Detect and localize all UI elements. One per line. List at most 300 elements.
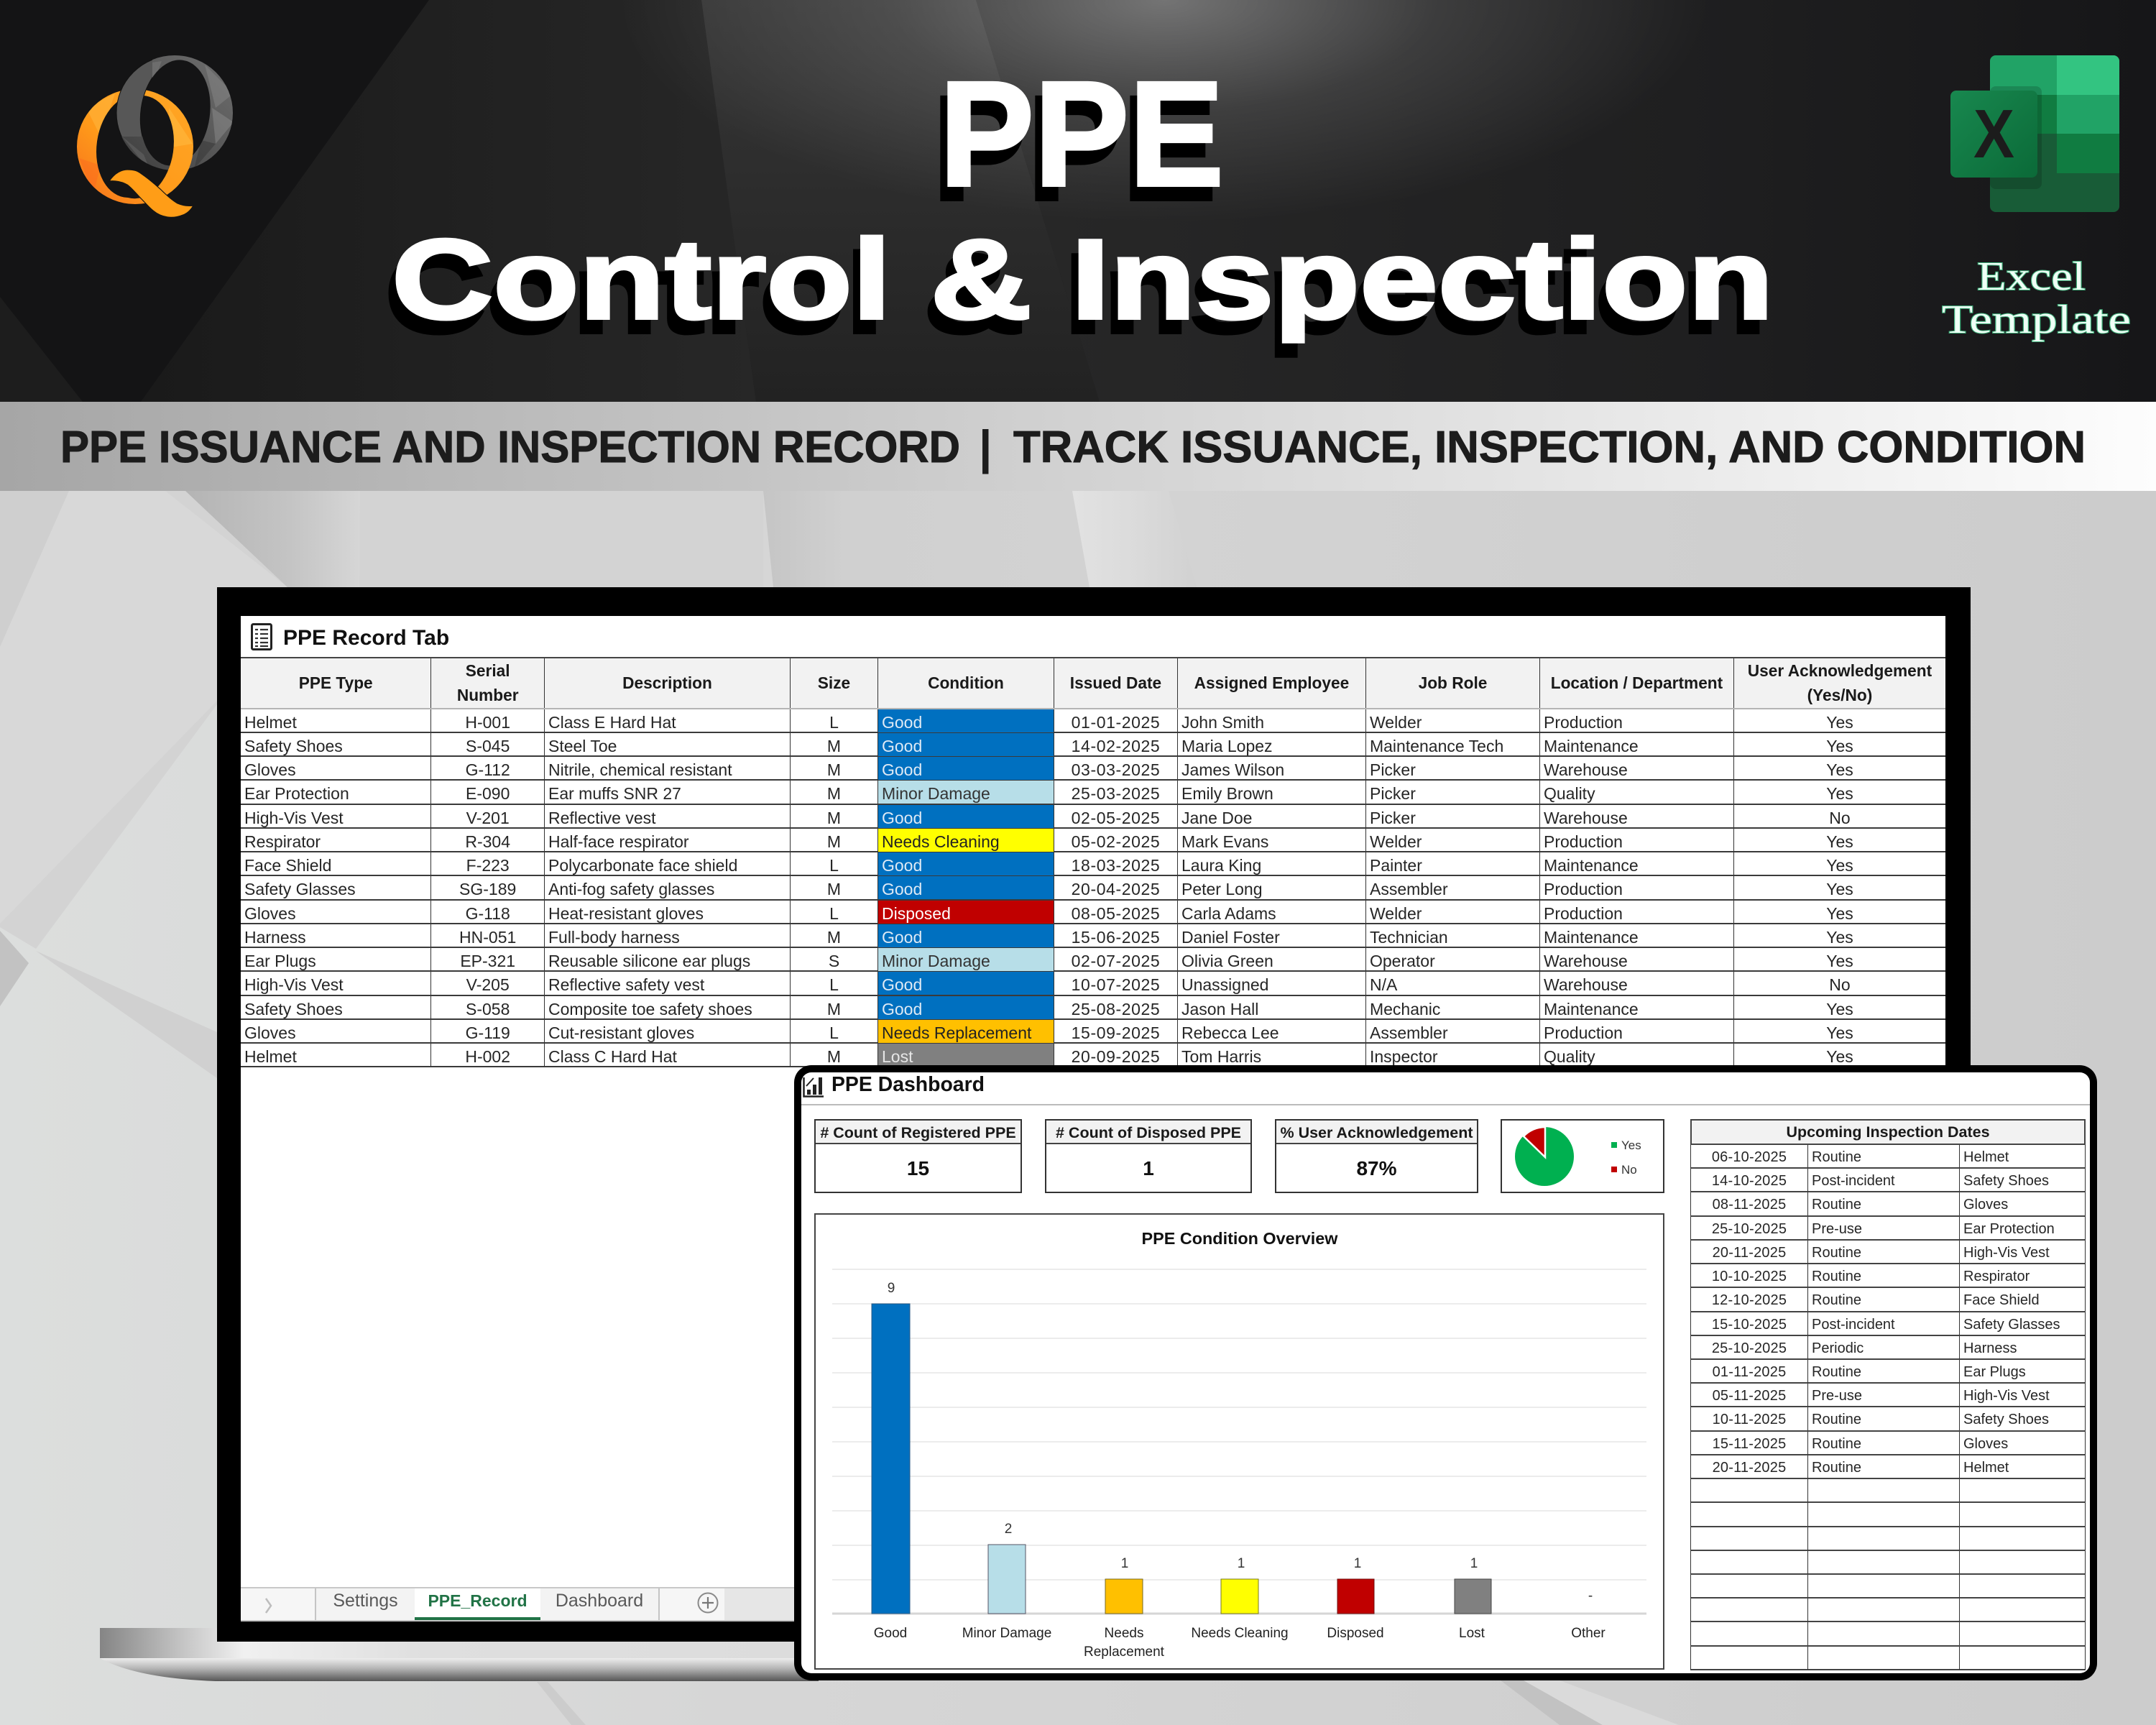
bar: Minor Damage: [962, 1522, 1051, 1641]
title: Control & Inspection: Control & Inspection: [392, 216, 1774, 343]
row: Safety Glasses SG-189: SG-189: [459, 880, 516, 898]
row: Safety Shoes S-058: Yes: [1826, 999, 1853, 1018]
row 20-11-2025: 20-11-2025: [1713, 1245, 1786, 1261]
row 06-10-2025: [1690, 1145, 2086, 1169]
row: Gloves G-112: James Wilson: [1181, 760, 1284, 779]
row: Gloves G-119: Yes: [1826, 1024, 1853, 1042]
row 15-10-2025: Post-incident: [1812, 1317, 1895, 1333]
row: Safety Shoes S-045: Maria Lopez: [1181, 737, 1273, 755]
row: Gloves G-112: 03-03-2025: [1072, 760, 1160, 779]
row: Gloves G-119: Production: [1544, 1024, 1623, 1042]
tab: PPE_Record: PPE_Record: [428, 1591, 528, 1610]
row: Helmet H-002: Tom Harris: [1181, 1047, 1261, 1066]
row: Safety Shoes S-058: 25-08-2025: [1072, 999, 1160, 1018]
icon: bar chart: [803, 1077, 824, 1098]
empty rows: [1690, 1479, 2086, 1670]
row 10-10-2025: Respirator: [1963, 1269, 2030, 1284]
row 01-11-2025: Routine: [1812, 1364, 1861, 1380]
row: Helmet H-002: Helmet: [244, 1047, 297, 1066]
row: High-Vis Vest V-205: Good: [882, 975, 922, 994]
row 01-11-2025: Ear Plugs: [1963, 1364, 2026, 1380]
row: Harness HN-051: [241, 924, 1945, 948]
row: Helmet H-002: Inspector: [1370, 1047, 1438, 1066]
row: Safety Shoes S-045: Steel Toe: [548, 737, 617, 755]
title: PPE: PPE: [939, 51, 1224, 218]
row: Gloves G-118: G-118: [466, 904, 510, 923]
row 06-10-2025: 06-10-2025: [1712, 1149, 1787, 1165]
row: High-Vis Vest V-205: N/A: [1370, 975, 1397, 994]
row: Helmet H-002: M: [827, 1047, 841, 1066]
row: Ear Protection E-090: Ear muffs SNR 27: [548, 784, 681, 803]
row: Safety Shoes S-058: Mechanic: [1370, 999, 1440, 1018]
row: High-Vis Vest V-201: High-Vis Vest: [244, 808, 344, 827]
row: Gloves G-112: Good: [882, 760, 922, 779]
row: Respirator R-304: [241, 829, 1945, 852]
row: Gloves G-112: Warehouse: [1544, 760, 1628, 779]
KPI label: # Count of Disposed PPE: [1056, 1124, 1241, 1141]
table: upcoming inspection dates: [1690, 1119, 2086, 1670]
row: Respirator R-304: M: [827, 832, 841, 851]
table header row: PPE Type: [299, 673, 373, 692]
row: High-Vis Vest V-205: V-205: [466, 975, 510, 994]
row 25-10-2025 periodic: [1690, 1336, 2086, 1360]
row 25-10-2025: Pre-use: [1812, 1221, 1862, 1237]
KPI: count of registered PPE: [814, 1119, 1022, 1193]
row: Safety Shoes S-058: Composite toe safety shoes: [548, 999, 752, 1018]
logo: interlocked Q and O: [77, 55, 233, 217]
bar chart: PPE Condition Overview: PPE Condition Overview: [1142, 1229, 1338, 1248]
row: Safety Shoes S-058: S-058: [466, 999, 510, 1018]
row: Face Shield F-223: 18-03-2025: [1072, 856, 1160, 875]
row: Face Shield F-223: Yes: [1826, 856, 1853, 875]
row: High-Vis Vest V-201: Reflective vest: [548, 808, 656, 827]
row: Respirator R-304: 05-02-2025: [1072, 832, 1160, 851]
caption: Excel Template: Template: [1942, 298, 2131, 342]
row: Ear Plugs EP-321: 02-07-2025: [1072, 952, 1160, 970]
row: Harness HN-051: M: [827, 928, 841, 947]
row 05-11-2025: Pre-use: [1812, 1388, 1862, 1404]
row: Ear Protection E-090: Ear Protection: [244, 784, 349, 803]
row: Safety Shoes S-045: 14-02-2025: [1072, 737, 1160, 755]
pie chart: acknowledgement yes/no: Yes: [1621, 1138, 1641, 1152]
row 15-11-2025: Routine: [1812, 1436, 1861, 1452]
row: Respirator R-304: Yes: [1826, 832, 1853, 851]
table header row: Issued Date: [1070, 673, 1161, 692]
table header row: Serial: [466, 661, 510, 680]
row: High-Vis Vest V-201: Picker: [1370, 808, 1416, 827]
row: Safety Glasses SG-189: Safety Glasses: [244, 880, 356, 898]
row 20-11-2025: High-Vis Vest: [1963, 1245, 2050, 1261]
icon: scroll arrow: [265, 1598, 272, 1613]
row: High-Vis Vest V-201: [241, 805, 1945, 829]
row: Respirator R-304: Mark Evans: [1181, 832, 1268, 851]
row: Safety Shoes S-045: [241, 733, 1945, 757]
row: Helmet H-001: Production: [1544, 713, 1623, 732]
row: Safety Glasses SG-189: Production: [1544, 880, 1623, 898]
bar: Disposed: [1327, 1556, 1384, 1641]
row: Safety Glasses SG-189: M: [827, 880, 841, 898]
row: Gloves G-119: Cut-resistant gloves: [548, 1024, 694, 1042]
bar: Other: Other: [1571, 1626, 1606, 1641]
row: Helmet H-001: L: [829, 713, 839, 732]
row: Gloves G-119: L: [829, 1024, 839, 1042]
row: High-Vis Vest V-205: Unassigned: [1181, 975, 1268, 994]
tab: Settings: [315, 1588, 415, 1620]
row: Gloves G-118: Gloves: [244, 904, 296, 923]
caption: Excel Template: Excel: [1977, 254, 2086, 299]
row 05-11-2025: 05-11-2025: [1713, 1388, 1786, 1404]
row 25-10-2025: [1690, 1217, 2086, 1241]
KPI value: 15: [907, 1157, 929, 1179]
row: High-Vis Vest V-205: 10-07-2025: [1072, 975, 1160, 994]
row: High-Vis Vest V-201: M: [827, 808, 841, 827]
table: PPE records: [241, 657, 1945, 1067]
row: Harness HN-051: Yes: [1826, 928, 1853, 947]
row 15-10-2025: 15-10-2025: [1712, 1317, 1787, 1333]
row: Ear Protection E-090: Quality: [1544, 784, 1595, 803]
row 25-10-2025: 25-10-2025: [1712, 1221, 1787, 1237]
KPI label: [1046, 1121, 1250, 1144]
row: Respirator R-304: Production: [1544, 832, 1623, 851]
row: Safety Shoes S-045: Maintenance: [1544, 737, 1639, 755]
table header row: Assigned Employee: [1194, 673, 1349, 692]
KPI value: 87%: [1356, 1157, 1397, 1179]
row: Gloves G-118: Production: [1544, 904, 1623, 923]
row: High-Vis Vest V-201: No: [1829, 808, 1851, 827]
row: Gloves G-118: Carla Adams: [1181, 904, 1276, 923]
row 20-11-2025 helmet: Helmet: [1963, 1460, 2009, 1476]
icon: Excel logo: X: [1973, 96, 2014, 172]
row: High-Vis Vest V-205: High-Vis Vest: [244, 975, 344, 994]
row: Face Shield F-223: Laura King: [1181, 856, 1261, 875]
row 10-10-2025: Routine: [1812, 1269, 1861, 1284]
row: Gloves G-112: Yes: [1826, 760, 1853, 779]
row 14-10-2025: Safety Shoes: [1963, 1173, 2049, 1189]
row 08-11-2025: Routine: [1812, 1197, 1861, 1213]
panel: PPE Dashboard window: [794, 1065, 2097, 1680]
bar: Lost: Lost: [1459, 1626, 1485, 1641]
row: Respirator R-304: Half-face respirator: [548, 832, 689, 851]
row: Harness HN-051: Technician: [1370, 928, 1448, 947]
row 08-11-2025: 08-11-2025: [1713, 1197, 1786, 1213]
row: High-Vis Vest V-205: Reflective safety vest: [548, 975, 704, 994]
row 06-10-2025: Routine: [1812, 1149, 1861, 1165]
row: Gloves G-112: M: [827, 760, 841, 779]
row: Helmet H-002: Lost: [882, 1047, 913, 1066]
row: Ear Plugs EP-321: [241, 948, 1945, 972]
table heading: [1690, 1121, 2086, 1145]
row 06-10-2025: Helmet: [1963, 1149, 2009, 1165]
subtitle band text: |: [979, 420, 992, 475]
subtitle band text: [60, 420, 2086, 475]
row: Safety Glasses SG-189: Good: [882, 880, 922, 898]
tab: Dashboard: [540, 1588, 660, 1620]
bar: Disposed: 1: [1354, 1556, 1361, 1571]
KPI label: [1276, 1121, 1477, 1144]
row 14-10-2025: 14-10-2025: [1712, 1173, 1787, 1189]
row 01-11-2025: [1690, 1360, 2086, 1384]
row: Harness HN-051: HN-051: [459, 928, 516, 947]
row: Safety Shoes S-058: M: [827, 999, 841, 1018]
row: Ear Protection E-090: Minor Damage: [882, 784, 990, 803]
row: Helmet H-002: Yes: [1826, 1047, 1853, 1066]
row: Gloves G-119: Assembler: [1370, 1024, 1448, 1042]
row: Gloves G-118: Welder: [1370, 904, 1422, 923]
bar: Needs Replacement: [1084, 1556, 1165, 1660]
table header row: Location / Department: [1551, 673, 1723, 692]
bar: Good: 9: [888, 1281, 895, 1296]
row: Safety Shoes S-058: [241, 996, 1945, 1020]
row 01-11-2025: 01-11-2025: [1713, 1364, 1786, 1380]
row: Safety Glasses SG-189: 20-04-2025: [1072, 880, 1160, 898]
table header row: Description: [622, 673, 712, 692]
table header row: Size: [818, 673, 850, 692]
row: Safety Glasses SG-189: [241, 876, 1945, 900]
bar: Good: [872, 1281, 910, 1641]
row 10-11-2025: Routine: [1812, 1412, 1861, 1427]
row: Safety Shoes S-045: Yes: [1826, 737, 1853, 755]
row: Helmet H-002: Class C Hard Hat: [548, 1047, 677, 1066]
row: Safety Glasses SG-189: Peter Long: [1181, 880, 1263, 898]
laptop screen bezel: [217, 587, 1971, 1642]
row: Harness HN-051: Good: [882, 928, 922, 947]
row: High-Vis Vest V-205: L: [829, 975, 839, 994]
row: Face Shield F-223: Polycarbonate face shield: [548, 856, 737, 875]
row: Helmet H-002: [241, 1044, 1945, 1067]
row: Ear Protection E-090: Picker: [1370, 784, 1416, 803]
row 12-10-2025: Face Shield: [1963, 1292, 2040, 1308]
icon: add sheet: [697, 1593, 719, 1613]
row 25-10-2025: Ear Protection: [1963, 1221, 2055, 1237]
row: Gloves G-118: Yes: [1826, 904, 1853, 923]
divider: [801, 1104, 2090, 1105]
row: Helmet H-001: Welder: [1370, 713, 1422, 732]
row 25-10-2025 periodic: 25-10-2025: [1712, 1340, 1787, 1356]
row: High-Vis Vest V-205: No: [1829, 975, 1851, 994]
row: Face Shield F-223: L: [829, 856, 839, 875]
row 25-10-2025 periodic: Periodic: [1812, 1340, 1864, 1356]
row: Gloves G-118: Heat-resistant gloves: [548, 904, 704, 923]
row: High-Vis Vest V-201: Jane Doe: [1181, 808, 1252, 827]
bar chart: PPE Condition Overview: [814, 1213, 1664, 1670]
row: Face Shield F-223: Maintenance: [1544, 856, 1639, 875]
row: Ear Protection E-090: M: [827, 784, 841, 803]
row 20-11-2025: [1690, 1241, 2086, 1264]
row: Face Shield F-223: Good: [882, 856, 922, 875]
table header row: Number: [457, 686, 519, 704]
bar: Minor Damage: Minor Damage: [962, 1626, 1051, 1641]
heading: PPE Record Tab: PPE Record Tab: [283, 626, 449, 650]
row: Safety Shoes S-058: Maintenance: [1544, 999, 1639, 1018]
row 12-10-2025: 12-10-2025: [1712, 1292, 1787, 1308]
row: Gloves G-112: [241, 757, 1945, 781]
row: Ear Protection E-090: 25-03-2025: [1072, 784, 1160, 803]
row 15-11-2025: [1690, 1432, 2086, 1455]
row 14-10-2025: Post-incident: [1812, 1173, 1895, 1189]
row 20-11-2025: Routine: [1812, 1245, 1861, 1261]
row: Ear Plugs EP-321: Minor Damage: [882, 952, 990, 970]
row: Safety Glasses SG-189: Yes: [1826, 880, 1853, 898]
bar: Needs Cleaning: [1191, 1556, 1289, 1641]
row: Helmet H-001: 01-01-2025: [1072, 713, 1160, 732]
row: High-Vis Vest V-201: Good: [882, 808, 922, 827]
row: Face Shield F-223: Painter: [1370, 856, 1422, 875]
row 10-11-2025: [1690, 1407, 2086, 1432]
bar: Disposed: Disposed: [1327, 1626, 1384, 1641]
pie chart: acknowledgement yes/no: [1501, 1119, 1664, 1193]
sheet tab bar: [241, 1587, 1945, 1622]
row: Gloves G-112: G-112: [466, 760, 510, 779]
bar: Needs Replacement: Needs: [1105, 1626, 1143, 1641]
caption: Excel Template: [1942, 254, 2131, 342]
row: Gloves G-119: Needs Replacement: [882, 1024, 1031, 1042]
subtitle band text: PPE ISSUANCE AND INSPECTION RECORD: [60, 423, 960, 472]
row: Gloves G-118: L: [829, 904, 839, 923]
row: Ear Plugs EP-321: Yes: [1826, 952, 1853, 970]
bar: Needs Cleaning: Needs Cleaning: [1191, 1626, 1289, 1641]
bar: Needs Replacement: 1: [1121, 1556, 1128, 1571]
bar: Needs Cleaning: 1: [1238, 1556, 1245, 1571]
row: Ear Plugs EP-321: S: [829, 952, 839, 970]
row: Ear Protection E-090: [241, 781, 1945, 805]
row: Safety Glasses SG-189: Assembler: [1370, 880, 1448, 898]
row: Ear Plugs EP-321: Reusable silicone ear plugs: [548, 952, 750, 970]
heading: PPE Dashboard: PPE Dashboard: [831, 1073, 985, 1096]
bar: Needs Replacement: Replacement: [1084, 1644, 1165, 1660]
bar: Lost: 1: [1470, 1556, 1478, 1571]
row 20-11-2025 helmet: 20-11-2025: [1713, 1460, 1786, 1476]
row: High-Vis Vest V-205: [241, 972, 1945, 996]
row: Helmet H-001: Good: [882, 713, 922, 732]
row: Respirator R-304: R-304: [465, 832, 510, 851]
KPI label: # Count of Registered PPE: [820, 1124, 1016, 1141]
row: Respirator R-304: Respirator: [244, 832, 321, 851]
row: Gloves G-118: 08-05-2025: [1072, 904, 1160, 923]
row: Respirator R-304: Needs Cleaning: [882, 832, 1000, 851]
panel: PPE Record Tab sheet: [241, 616, 1945, 1622]
row: Gloves G-119: G-119: [466, 1024, 510, 1042]
row: Ear Protection E-090: Yes: [1826, 784, 1853, 803]
tab: Settings: Settings: [333, 1591, 398, 1611]
row: Harness HN-051: Maintenance: [1544, 928, 1639, 947]
KPI label: % User Acknowledgement: [1280, 1124, 1473, 1141]
table header row: Condition: [928, 673, 1004, 692]
row: Gloves G-112: Picker: [1370, 760, 1416, 779]
row: Gloves G-119: Gloves: [244, 1024, 296, 1042]
row 20-11-2025 helmet: [1690, 1455, 2086, 1479]
row: Safety Shoes S-045: S-045: [466, 737, 510, 755]
row: Ear Plugs EP-321: Ear Plugs: [244, 952, 316, 970]
row 14-10-2025: [1690, 1169, 2086, 1192]
bar: Other: -: [1588, 1588, 1593, 1604]
row: Ear Plugs EP-321: Warehouse: [1544, 952, 1628, 970]
row 25-10-2025 periodic: Harness: [1963, 1340, 2017, 1356]
row: Face Shield F-223: Face Shield: [244, 856, 331, 875]
row: Safety Shoes S-058: Jason Hall: [1181, 999, 1258, 1018]
row: Gloves G-118: [241, 900, 1945, 924]
row: Gloves G-119: [241, 1020, 1945, 1044]
row: Ear Protection E-090: E-090: [466, 784, 510, 803]
row 10-10-2025: [1690, 1264, 2086, 1288]
pie chart: acknowledgement yes/no: No: [1621, 1163, 1637, 1177]
row: Helmet H-002: Quality: [1544, 1047, 1595, 1066]
icon: Excel logo: [1950, 55, 2119, 212]
row: Gloves G-119: Rebecca Lee: [1181, 1024, 1279, 1042]
row 05-11-2025: High-Vis Vest: [1963, 1388, 2050, 1404]
table header row: (Yes/No): [1807, 686, 1872, 704]
row: Harness HN-051: Daniel Foster: [1181, 928, 1280, 947]
row: Face Shield F-223: F-223: [466, 856, 510, 875]
laptop base: [100, 1628, 819, 1681]
table header row: User Acknowledgement: [1748, 661, 1932, 680]
row: Helmet H-001: Yes: [1826, 713, 1853, 732]
row: Helmet H-001: Class E Hard Hat: [548, 713, 676, 732]
row: Harness HN-051: Harness: [244, 928, 306, 947]
row: Safety Shoes S-045: Safety Shoes: [244, 737, 343, 755]
row: Ear Protection E-090: Emily Brown: [1181, 784, 1273, 803]
bar: Minor Damage: 2: [1005, 1522, 1012, 1537]
row: Gloves G-112: Gloves: [244, 760, 296, 779]
row: Safety Shoes S-045: M: [827, 737, 841, 755]
row: Gloves G-112: Nitrile, chemical resistant: [548, 760, 732, 779]
row: High-Vis Vest V-201: V-201: [466, 808, 510, 827]
row 12-10-2025: [1690, 1288, 2086, 1312]
row: Ear Plugs EP-321: Operator: [1370, 952, 1435, 970]
row 15-10-2025: [1690, 1312, 2086, 1336]
row: Helmet H-002: H-002: [465, 1047, 510, 1066]
row 20-11-2025 helmet: Routine: [1812, 1460, 1861, 1476]
table header row: Job Role: [1419, 673, 1487, 692]
row 12-10-2025: Routine: [1812, 1292, 1861, 1308]
KPI: count of disposed PPE: [1045, 1119, 1252, 1193]
row: Respirator R-304: Welder: [1370, 832, 1422, 851]
table heading: Upcoming Inspection Dates: [1786, 1123, 1990, 1141]
row: Helmet H-001: Helmet: [244, 713, 297, 732]
row 10-10-2025: 10-10-2025: [1712, 1269, 1787, 1284]
row: High-Vis Vest V-205: Warehouse: [1544, 975, 1628, 994]
row: Harness HN-051: Full-body harness: [548, 928, 680, 947]
row: Helmet H-001: H-001: [465, 713, 510, 732]
bar: Good: Good: [874, 1626, 907, 1641]
row: Safety Shoes S-045: Maintenance Tech: [1370, 737, 1503, 755]
row: Safety Shoes S-045: Good: [882, 737, 922, 755]
subtitle band text: TRACK ISSUANCE, INSPECTION, AND CONDITION: [1013, 423, 2086, 472]
KPI value: 1: [1143, 1157, 1154, 1179]
row 15-11-2025: 15-11-2025: [1713, 1436, 1786, 1452]
row: Helmet H-001: [241, 709, 1945, 733]
row: Harness HN-051: 15-06-2025: [1072, 928, 1160, 947]
row 10-11-2025: 10-11-2025: [1713, 1412, 1786, 1427]
KPI: user acknowledgement: [1275, 1119, 1478, 1193]
tab: Dashboard: Dashboard: [556, 1591, 643, 1611]
row: High-Vis Vest V-201: 02-05-2025: [1072, 808, 1160, 827]
row: High-Vis Vest V-201: Warehouse: [1544, 808, 1628, 827]
tab: PPE_Record: [415, 1588, 540, 1620]
grey tab bar filler: [724, 1588, 1945, 1620]
icon: checklist: [251, 623, 272, 650]
row: Ear Plugs EP-321: Olivia Green: [1181, 952, 1273, 970]
row 05-11-2025: [1690, 1384, 2086, 1407]
bar: Other: [1571, 1588, 1606, 1641]
row: Safety Glasses SG-189: Anti-fog safety glasses: [548, 880, 714, 898]
row: Face Shield F-223: [241, 852, 1945, 876]
KPI label: [816, 1121, 1021, 1144]
row: Helmet H-002: 20-09-2025: [1072, 1047, 1160, 1066]
row: Ear Plugs EP-321: EP-321: [460, 952, 515, 970]
row: Gloves G-119: 15-09-2025: [1072, 1024, 1160, 1042]
row: Gloves G-118: Disposed: [882, 904, 951, 923]
row: Safety Shoes S-058: Good: [882, 999, 922, 1018]
